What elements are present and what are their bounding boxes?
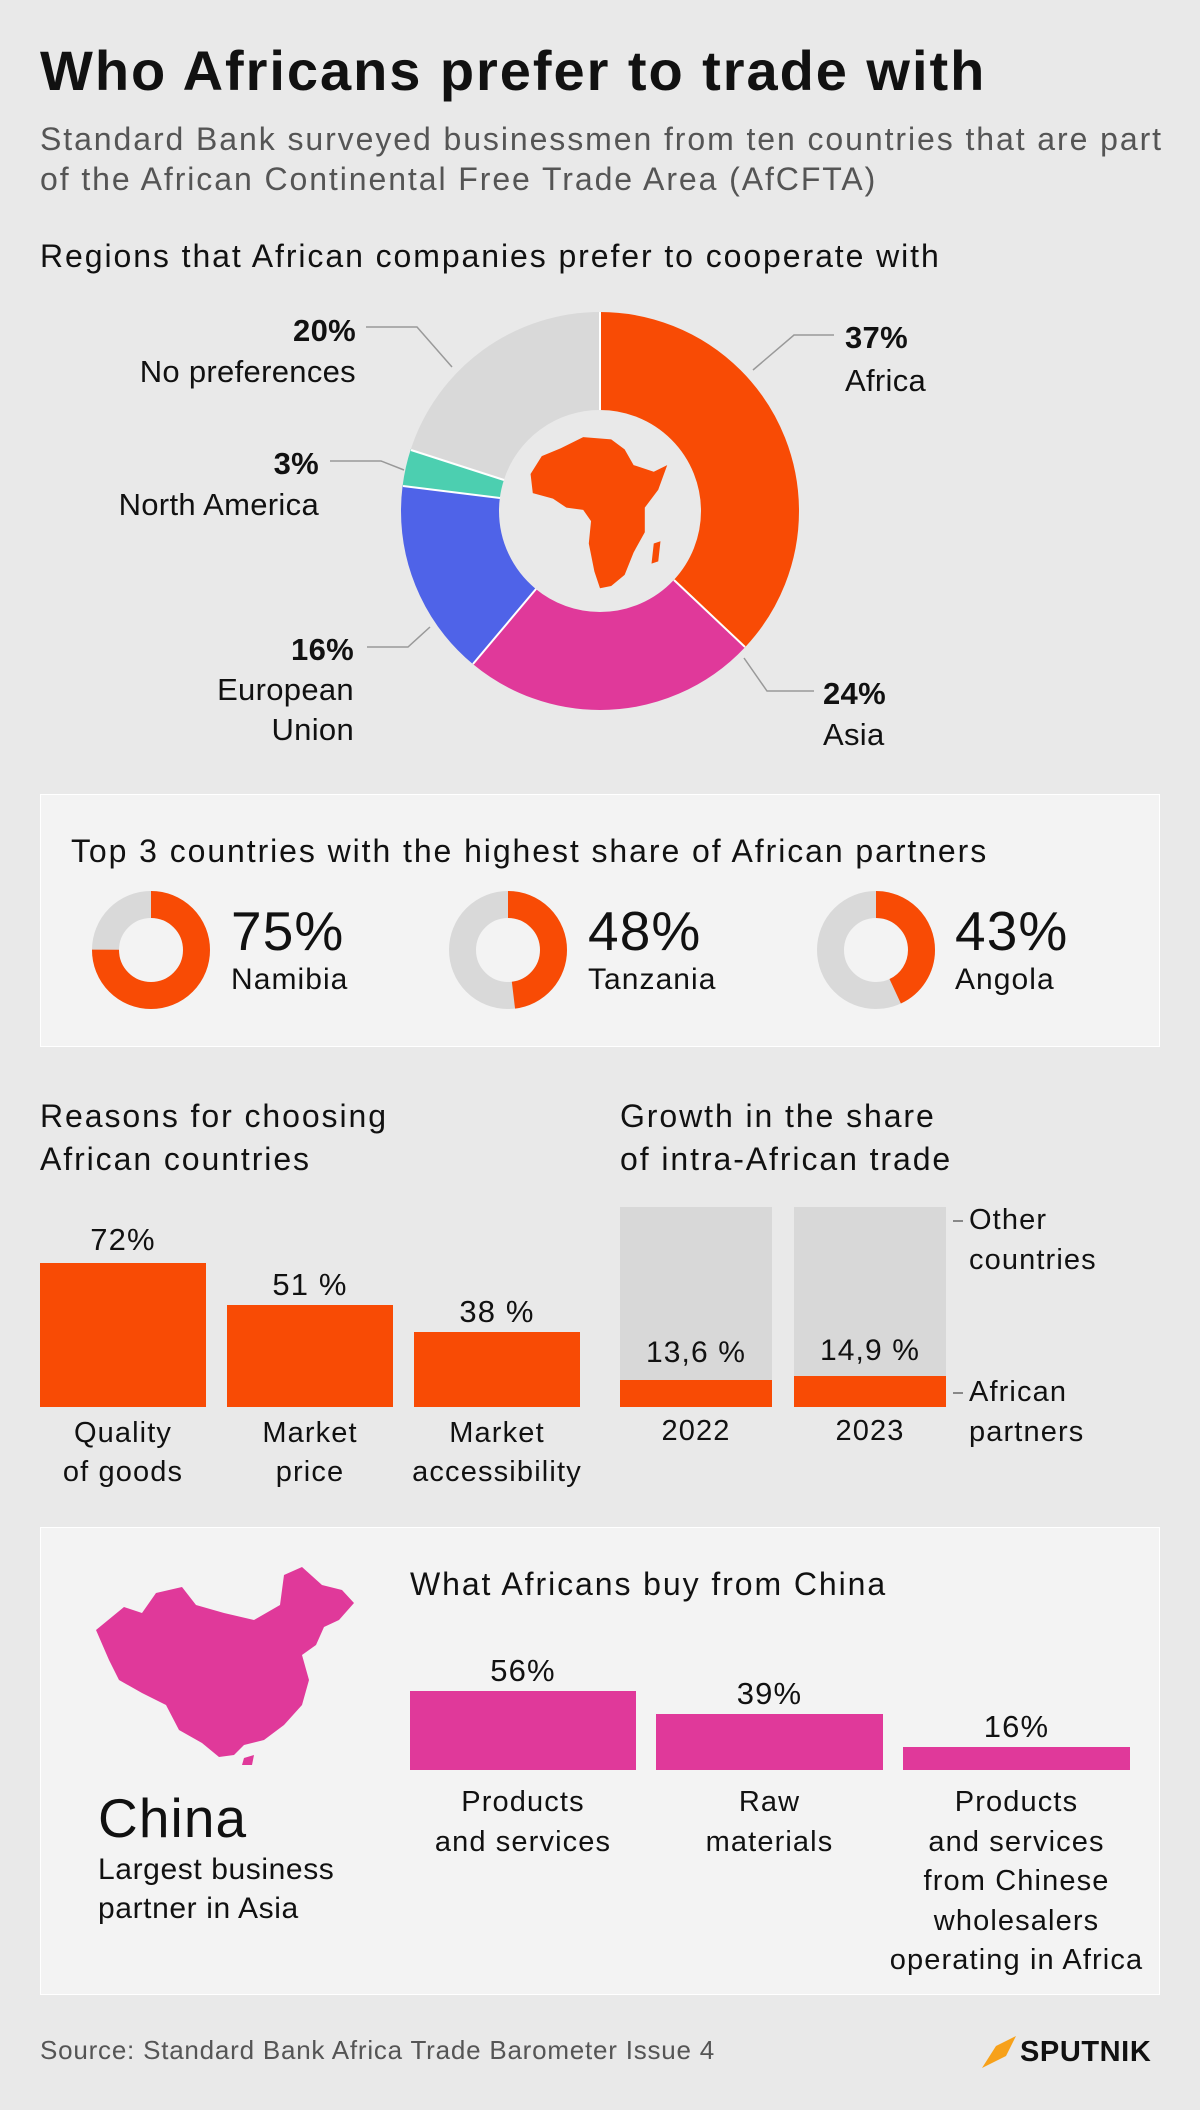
subtitle: Standard Bank surveyed businessmen from ten countries that are part [40, 121, 1163, 157]
heading: reasons: Reasons for choosing [40, 1098, 388, 1134]
bar chart: china purchases: materials [706, 1826, 833, 1858]
china description [98, 1853, 334, 1925]
label: no preferences: 20% [293, 313, 356, 348]
stacked bar chart: growth: 2023 [836, 1415, 904, 1447]
heading: regions: Regions that African companies prefer to cooperate with [40, 238, 941, 274]
bar chart: reasons: Market [449, 1417, 545, 1449]
stat: namibia: Namibia [231, 963, 348, 996]
donut: tanzania [449, 891, 567, 1009]
bar chart: reasons: 51 % [272, 1267, 348, 1302]
label: no preferences [140, 313, 356, 389]
label: EU: European [217, 672, 354, 707]
stat: angola [955, 900, 1068, 996]
bar chart: china purchases: and services [928, 1826, 1105, 1858]
stat: angola: Angola [955, 963, 1055, 996]
bar chart: china purchases: wholesalers [934, 1904, 1099, 1936]
label: asia [823, 676, 886, 752]
stat: tanzania: Tanzania [588, 963, 716, 996]
stacked bar chart: growth: African [969, 1376, 1067, 1408]
stacked bar chart: growth: countries [969, 1244, 1097, 1276]
label: EU: 16% [291, 632, 354, 667]
heading: reasons: African countries [40, 1141, 311, 1177]
logo: sputnik: SPUTNIK [1020, 2036, 1151, 2068]
label: EU: Union [271, 712, 354, 747]
donut chart: regions [330, 312, 834, 710]
bar chart: china purchases: and services [435, 1826, 611, 1858]
label: asia: Asia [823, 717, 885, 752]
china label: China [98, 1787, 247, 1849]
heading: growth [620, 1098, 952, 1177]
label: africa: 37% [845, 320, 908, 355]
bar chart: reasons: Quality [74, 1417, 172, 1449]
stat: tanzania [588, 900, 716, 996]
leader lines [330, 327, 834, 691]
stacked bar chart: growth: 14,9 % [820, 1334, 920, 1367]
stacked bar chart: growth: partners [969, 1416, 1084, 1448]
bar chart: china purchases: from Chinese [924, 1865, 1109, 1897]
bar chart: china purchases: operating in Africa [890, 1944, 1143, 1976]
subtitle [40, 121, 1163, 197]
label: EU [217, 632, 354, 747]
label: asia: 24% [823, 676, 886, 711]
bar chart: china purchases: Products [461, 1786, 585, 1818]
donut: angola [817, 891, 935, 1009]
stat: namibia: 75% [231, 900, 344, 962]
bar chart: reasons [40, 1222, 582, 1488]
donut: namibia [92, 891, 210, 1009]
icon: china map [96, 1567, 354, 1765]
bar chart: china purchases: Products [955, 1786, 1078, 1818]
panel: china [40, 1527, 1160, 1995]
bar chart: reasons: accessibility [412, 1456, 582, 1488]
label: africa [845, 320, 926, 398]
panel: top 3 countries [40, 794, 1160, 1047]
stat: namibia [231, 900, 348, 996]
bar chart: china purchases: 56% [490, 1653, 556, 1688]
bar chart: china purchases [410, 1653, 1143, 1976]
label: north america: North America [119, 487, 319, 522]
subtitle: of the African Continental Free Trade Area (AfCFTA) [40, 161, 877, 197]
bar chart: reasons: 72% [90, 1222, 156, 1257]
icon: africa map [531, 437, 667, 588]
heading: what africans buy: What Africans buy from China [410, 1566, 887, 1602]
heading: growth: Growth in the share [620, 1098, 936, 1134]
label: north america [119, 446, 319, 522]
heading: growth: of intra-African trade [620, 1141, 952, 1177]
china description: Largest business [98, 1853, 334, 1886]
bar chart: reasons: of goods [63, 1456, 183, 1488]
stacked bar chart: growth [620, 1204, 1097, 1448]
bar chart: china purchases: 39% [737, 1676, 802, 1711]
stacked bar chart: growth: Other [969, 1204, 1047, 1236]
stacked bar chart: growth: 2022 [662, 1415, 730, 1447]
bar chart: reasons: price [276, 1456, 344, 1488]
title: Who Africans prefer to trade with [40, 39, 986, 102]
heading: Top 3 countries with the highest share of African partners [71, 833, 988, 869]
label: africa: Africa [845, 363, 926, 398]
bar chart: china purchases: 16% [984, 1709, 1049, 1744]
stacked bar chart: growth: 13,6 % [646, 1336, 746, 1369]
heading: reasons [40, 1098, 388, 1177]
label: north america: 3% [274, 446, 319, 481]
stat: angola: 43% [955, 900, 1068, 962]
bar chart: reasons: Market [262, 1417, 358, 1449]
source: Source: Standard Bank Africa Trade Barometer Issue 4 [40, 2035, 715, 2065]
bar chart: reasons: 38 % [459, 1294, 535, 1329]
bar chart: china purchases: Raw [739, 1786, 800, 1818]
china description: partner in Asia [98, 1892, 299, 1925]
label: no preferences: No preferences [140, 354, 356, 389]
stat: tanzania: 48% [588, 900, 701, 962]
